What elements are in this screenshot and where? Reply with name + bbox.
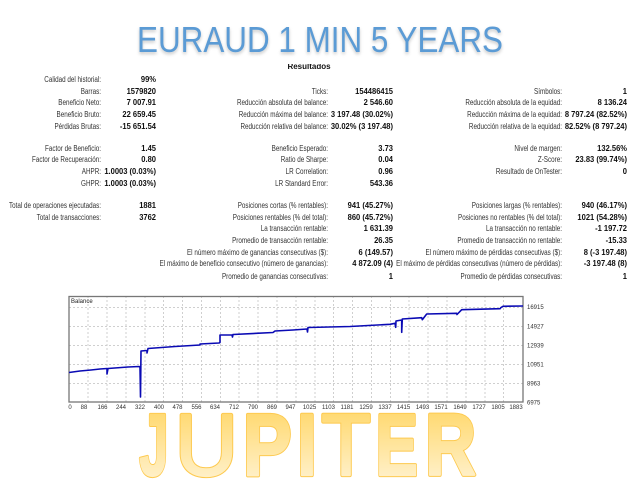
results table: column 2: 0.96 — [378, 167, 394, 176]
results table: column 3: 0 — [623, 167, 628, 176]
chart: balance line chart — [68, 296, 544, 411]
x axis labels: 1025 — [303, 405, 317, 411]
x axis labels: 1727 — [472, 405, 486, 411]
results table: column 2: 6 (149.57) — [359, 248, 393, 257]
results table: column 1: -15 651.54 — [120, 122, 157, 131]
results table: column 3: 23.83 (99.74%) — [575, 155, 627, 164]
results table: column 2: Promedio de ganancias consecutivas: — [222, 271, 328, 281]
results table: column 3: 8 (-3 197.48) — [584, 248, 627, 257]
results table: column 1: Pérdidas Brutas: — [54, 121, 101, 131]
results table: column 3: Promedio de pérdidas consecutivas: — [460, 271, 562, 281]
results table: column 2: LR Correlation: — [286, 166, 328, 176]
results table: column 3: 8 797.24 (82.52%) — [565, 110, 627, 119]
results table: column 3: 1 — [623, 272, 628, 281]
x axis labels: 1181 — [341, 405, 354, 411]
heading: Resultados: Resultados — [287, 62, 331, 71]
title: EURAUD 1 MIN 5 YEARS: EURAUD 1 MIN 5 YEARS — [137, 21, 503, 62]
balance curve — [69, 306, 523, 397]
y axis labels: 10951 — [527, 362, 544, 368]
results table: column 2: 2 546.60 — [364, 98, 394, 107]
x axis labels: 400 — [154, 405, 165, 411]
results table: column 1: Total de transacciones: — [37, 212, 101, 222]
results table: column 1: 7 007.91 — [127, 98, 157, 107]
results table: column 1: 99% — [141, 75, 156, 84]
x axis labels: 1649 — [453, 405, 467, 411]
results table: column 1: 1881 — [139, 201, 157, 210]
x axis labels: 1883 — [509, 405, 523, 411]
results table: column 2: 1 631.39 — [364, 224, 394, 233]
y axis labels — [527, 305, 544, 406]
results table: column 2: 3 197.48 (30.02%) — [331, 110, 393, 119]
results table: column 3: 82.52% (8 797.24) — [565, 122, 627, 131]
results table: column 3: Z-Score: — [538, 154, 562, 164]
results table: column 2: 3.73 — [378, 144, 394, 153]
x axis labels: 0 — [68, 405, 72, 411]
x axis labels: 478 — [172, 405, 183, 411]
results table: column 2: Beneficio Esperado: — [272, 143, 328, 153]
y axis labels: 6975 — [527, 400, 541, 406]
results table: column 1: GHPR: — [81, 178, 101, 188]
title: EURAUD 1 MIN 5 YEARS: EURAUD 1 MIN 5 YEARS — [137, 19, 503, 60]
results table: column 1: 1.45 — [141, 144, 157, 153]
results table: column 3: 1021 (54.28%) — [577, 213, 627, 222]
results table: column 1: 3762 — [139, 213, 157, 222]
results table: column 2: 860 (45.72%) — [348, 213, 393, 222]
results table: column 2: Ratio de Sharpe: — [281, 154, 328, 164]
results table: column 2: Promedio de transacción rentable: — [232, 235, 328, 245]
results table: column 1: Total de operaciones ejecutadas: — [9, 200, 101, 210]
results table: column 2: Posiciones rentables (% del total): — [233, 212, 328, 222]
x axis labels: 556 — [191, 405, 202, 411]
results table: column 1 — [9, 74, 157, 222]
results table: column 3 — [396, 86, 628, 281]
chart legend: Balance: Balance — [71, 299, 93, 305]
x axis labels — [68, 405, 523, 411]
results table: column 2: 154486415 — [355, 87, 394, 96]
x axis labels: 1103 — [322, 405, 336, 411]
results table: column 2: LR Standard Error: — [275, 178, 328, 188]
results table: column 3: Reducción absoluta de la equidad: — [465, 97, 562, 107]
results table: column 3: 8 136.24 — [598, 98, 628, 107]
results table: column 1: 22 659.45 — [122, 110, 157, 119]
results table: column 3: Reducción máxima de la equidad: — [467, 109, 562, 119]
x axis labels: 166 — [97, 405, 108, 411]
results table: column 2: El máximo de beneficio consecutivo (número de ganancias): — [160, 258, 328, 268]
results table: column 2: 941 (45.27%) — [348, 201, 393, 210]
x axis labels: 947 — [285, 405, 296, 411]
results table: column 3: 940 (46.17%) — [582, 201, 627, 210]
results table: column 1: Factor de Recuperación: — [32, 154, 101, 164]
results table: column 2: 0.04 — [378, 155, 394, 164]
x axis labels: 1493 — [416, 405, 430, 411]
chart frame — [69, 296, 523, 402]
x axis labels: 712 — [229, 405, 240, 411]
results table: column 1: Beneficio Bruto: — [57, 109, 101, 119]
results table: column 1: 1.0003 (0.03%) — [104, 179, 156, 188]
results table: column 1: 1.0003 (0.03%) — [104, 167, 156, 176]
results table: column 3: El número máximo de pérdidas consecutivas ($): — [426, 247, 562, 257]
x axis labels: 869 — [267, 405, 278, 411]
x axis labels: 634 — [210, 405, 221, 411]
y axis labels: 12939 — [527, 344, 544, 350]
results table: column 2: 4 872.09 (4) — [352, 259, 393, 268]
results table: column 3: -1 197.72 — [595, 224, 628, 233]
results table: column 3: Promedio de transacción no rentable: — [457, 235, 562, 245]
results table: column 3: 132.56% — [597, 144, 627, 153]
results table: column 2: 543.36 — [370, 179, 394, 188]
results table: column 2: Reducción absoluta del balance: — [237, 97, 328, 107]
x axis labels: 88 — [81, 405, 88, 411]
results table: column 2: Reducción máxima del balance: — [239, 109, 328, 119]
results table: column 1: AHPR: — [82, 166, 101, 176]
y axis labels: 16915 — [527, 305, 544, 311]
x axis labels: 1415 — [397, 405, 411, 411]
y axis labels: 14927 — [527, 324, 544, 330]
watermark: JUPITER — [139, 397, 476, 480]
x axis labels: 322 — [135, 405, 146, 411]
results table: column 2: 30.02% (3 197.48) — [331, 122, 393, 131]
results table: column 1: 0.80 — [141, 155, 157, 164]
results table: column 3: Símbolos: — [534, 86, 562, 96]
results table: column 3: El máximo de pérdidas consecutivas (número de pérdidas): — [396, 258, 562, 268]
results table: column 1: Beneficio Neto: — [58, 97, 101, 107]
results table: column 3: -3 197.48 (8) — [584, 259, 627, 268]
results table: column 1: 1579820 — [127, 87, 157, 96]
results table: column 1: Calidad del historial: — [44, 74, 101, 84]
x axis labels: 1805 — [491, 405, 505, 411]
results table: column 3: Posiciones no rentables (% del total): — [458, 212, 562, 222]
results table: column 1: Factor de Beneficio: — [45, 143, 101, 153]
results table: column 3: Posiciones largas (% rentables): — [472, 200, 562, 210]
x axis labels: 244 — [116, 405, 127, 411]
results table: column 1: Barras: — [81, 86, 101, 96]
results table: column 2: La transacción rentable: — [261, 223, 328, 233]
results table: column 3: -15.33 — [606, 236, 628, 245]
results table: column 3: Reducción relativa de la equidad: — [469, 121, 562, 131]
x axis labels: 1337 — [378, 405, 392, 411]
results table: column 2 — [160, 86, 394, 281]
results table: column 2: Reducción relativa del balance: — [240, 121, 328, 131]
results table: column 2: 26.35 — [374, 236, 394, 245]
results table: column 2: Posiciones cortas (% rentables): — [238, 200, 328, 210]
results table: column 2: El número máximo de ganancias consecutivas ($): — [187, 247, 328, 257]
results table: column 3: Nivel de margen: — [514, 143, 562, 153]
results table: column 2: 1 — [389, 272, 394, 281]
results table: column 3: 1 — [623, 87, 628, 96]
results table: column 3: Resultado de OnTester: — [496, 166, 562, 176]
x axis labels: 1571 — [434, 405, 448, 411]
x axis labels: 790 — [248, 405, 259, 411]
x axis labels: 1259 — [359, 405, 373, 411]
results table: column 3: La transacción no rentable: — [486, 223, 562, 233]
y axis labels: 8963 — [527, 382, 541, 388]
results table: column 2: Ticks: — [312, 86, 328, 96]
